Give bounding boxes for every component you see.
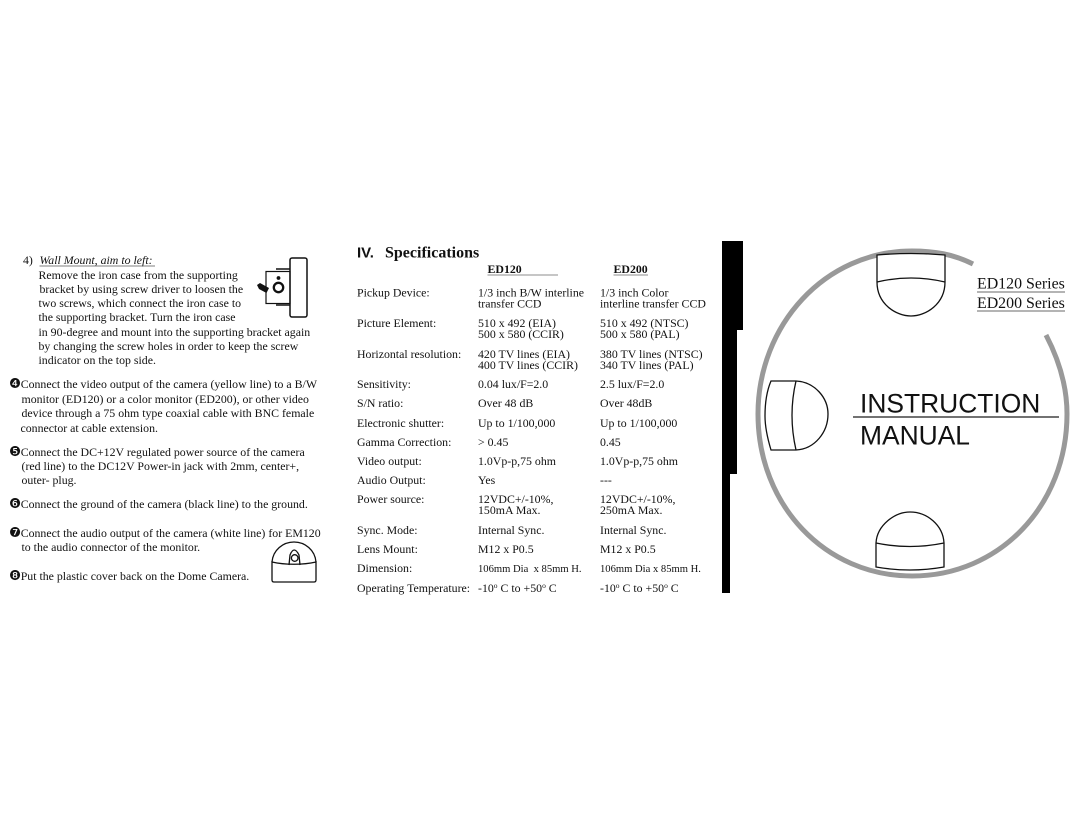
spec: sync mode: Sync. Mode:	[357, 523, 418, 537]
panel: installation steps	[9, 253, 321, 584]
text block: wall mount instructions: indicator on the top side.	[38, 353, 156, 367]
spec: audio output: ---	[600, 473, 612, 487]
spec: electronic shutter	[357, 416, 677, 430]
spec: s/n ratio: Over 48 dB	[478, 396, 533, 410]
spec: power source: 150mA Max.	[478, 503, 541, 517]
spec: operating temperature: C to +50	[498, 581, 542, 595]
step 8: Put the plastic cover back on the Dome Camera.	[21, 569, 249, 583]
spec: audio output	[357, 473, 612, 487]
spec: sensitivity: 2.5 lux/F=2.0	[600, 377, 664, 391]
title: instruction manual: MANUAL	[860, 420, 970, 450]
text block: wall mount instructions: two screws, which connect the iron case to	[38, 296, 241, 310]
step 4: Connect the video output of the camera (yellow line) to a B/W	[21, 377, 318, 391]
step 4: connector at cable extension.	[20, 421, 158, 435]
step 6: ❻	[9, 496, 21, 512]
text block: wall mount instructions: in 90-degree and mount into the supporting bracket again	[38, 325, 310, 339]
spec: sensitivity: Sensitivity:	[357, 377, 411, 391]
spec: s/n ratio: Over 48dB	[600, 396, 652, 410]
spec: horizontal resolution: 420 TV lines (EIA)	[478, 347, 570, 361]
series labels: ED200 Series	[977, 295, 1065, 312]
spec: operating temperature: o	[664, 581, 668, 590]
spec: operating temperature: C to +50	[620, 581, 664, 595]
spec: power source: 250mA Max.	[600, 503, 663, 517]
spec: sync mode	[357, 523, 666, 537]
spec: gamma correction: Gamma Correction:	[357, 435, 451, 449]
spec: lens mount: M12 x P0.5	[478, 542, 534, 556]
spec: electronic shutter: Up to 1/100,000	[600, 416, 677, 430]
spec: video output	[357, 454, 679, 468]
spec: pickup device: 1/3 inch B/W interline	[478, 286, 584, 300]
heading: specifications: IV.	[357, 244, 374, 262]
grey circle	[758, 251, 1067, 576]
icon: dome camera left	[765, 381, 828, 450]
icon: wall mount bracket	[257, 258, 307, 317]
heading: specifications: Specifications	[385, 244, 479, 262]
step 4: ❹	[9, 376, 21, 392]
spec: horizontal resolution	[357, 347, 703, 372]
spec: sensitivity	[357, 377, 664, 391]
panel: specifications	[357, 244, 706, 595]
series labels: ED120 Series	[977, 276, 1065, 292]
step 7: to the audio connector of the monitor.	[22, 540, 200, 554]
text block: wall mount instructions: the supporting bracket. Turn the iron case	[38, 310, 236, 324]
spec: sync mode: Internal Sync.	[478, 523, 544, 537]
title: instruction manual	[853, 388, 1059, 450]
spec: picture element: Picture Element:	[357, 316, 436, 330]
text block: wall mount instructions: bracket by using screw driver to loosen the	[40, 282, 243, 296]
spec: gamma correction	[357, 435, 621, 449]
step 4: monitor (ED120) or a color monitor (ED200), or other video	[22, 392, 309, 406]
step 5: Connect the DC+12V regulated power source of the camera	[21, 445, 305, 459]
spec: dimension: 106mm Dia x 85mm H.	[478, 564, 582, 575]
spec: operating temperature: o	[542, 581, 546, 590]
table header	[488, 262, 648, 276]
heading: wall mount: 4)	[23, 253, 33, 267]
spec: audio output: Audio Output:	[357, 473, 426, 487]
step 5: outer- plug.	[22, 473, 77, 487]
spec: dimension: 106mm Dia x 85mm H.	[600, 564, 701, 575]
spec: horizontal resolution: 340 TV lines (PAL)	[600, 358, 694, 372]
spec: power source	[357, 492, 675, 517]
spec: sensitivity: 0.04 lux/F=2.0	[478, 377, 548, 391]
spec: operating temperature: C	[668, 581, 679, 595]
spec: pickup device: transfer CCD	[478, 296, 542, 310]
step 5: ❺	[9, 444, 21, 460]
step 7: ❼	[9, 525, 21, 541]
panel: cover	[758, 251, 1067, 576]
spec: video output: 1.0Vp-p,75 ohm	[478, 454, 557, 468]
step 5	[9, 444, 305, 487]
step 6: Connect the ground of the camera (black line) to the ground.	[21, 497, 308, 511]
spec: sync mode: Internal Sync.	[600, 523, 666, 537]
table header: ED200	[614, 262, 648, 276]
spec: operating temperature: o	[494, 581, 498, 590]
spec: operating temperature	[357, 581, 679, 595]
spec: lens mount	[357, 542, 656, 556]
spec: s/n ratio: S/N ratio:	[357, 396, 403, 410]
spec: picture element: 500 x 580 (CCIR)	[478, 327, 564, 341]
icon: dome camera top	[877, 254, 945, 316]
spec: dimension: Dimension:	[357, 561, 412, 575]
text block: wall mount instructions: Remove the iron case from the supporting	[38, 268, 238, 282]
step 4: device through a 75 ohm type coaxial cable with BNC female	[22, 406, 314, 420]
title: instruction manual: INSTRUCTION	[860, 388, 1040, 418]
spec: pickup device	[357, 286, 706, 310]
step 8: ❽	[9, 568, 21, 584]
step 7: Connect the audio output of the camera (white line) for EM120	[21, 526, 321, 540]
spec: picture element: 500 x 580 (PAL)	[600, 327, 680, 341]
spec: video output: Video output:	[357, 454, 422, 468]
spec: operating temperature: -10	[600, 581, 616, 595]
spec: pickup device: Pickup Device:	[357, 286, 430, 300]
spec: horizontal resolution: Horizontal resolution:	[357, 347, 461, 361]
spec: horizontal resolution: 400 TV lines (CCIR)	[478, 358, 578, 372]
text block: wall mount instructions	[38, 268, 310, 367]
spec: gamma correction: 0.45	[600, 435, 621, 449]
spec: picture element: 510 x 492 (EIA)	[478, 316, 556, 330]
step 4	[9, 376, 318, 435]
spec: operating temperature: o	[616, 581, 620, 590]
series labels	[977, 276, 1065, 312]
icon: dome camera bottom	[876, 512, 944, 570]
spec: lens mount: Lens Mount:	[357, 542, 418, 556]
black binding bar	[722, 241, 743, 593]
spec: operating temperature: -10	[478, 581, 494, 595]
spec: power source: 12VDC+/-10%,	[600, 492, 675, 506]
step 7	[9, 525, 321, 554]
text block: wall mount instructions: by changing the screw holes in order to keep the screw	[38, 339, 299, 353]
spec: electronic shutter: Electronic shutter:	[357, 416, 444, 430]
spec: operating temperature: C	[546, 581, 557, 595]
step 5: (red line) to the DC12V Power-in jack with 2mm, center+,	[22, 459, 299, 473]
spec: power source: Power source:	[357, 492, 424, 506]
spec: lens mount: M12 x P0.5	[600, 542, 656, 556]
icon: dome camera	[272, 542, 316, 582]
table header: ED120	[488, 262, 522, 276]
spec: picture element	[357, 316, 689, 341]
spec: pickup device: interline transfer CCD	[600, 296, 706, 310]
spec: video output: 1.0Vp-p,75 ohm	[600, 454, 679, 468]
spec: pickup device: 1/3 inch Color	[600, 286, 668, 300]
spec: power source: 12VDC+/-10%,	[478, 492, 553, 506]
spec: picture element: 510 x 492 (NTSC)	[600, 316, 689, 330]
spec: dimension	[357, 561, 701, 575]
spec: s/n ratio	[357, 396, 652, 410]
spec: operating temperature: Operating Temperature:	[357, 581, 470, 595]
spec: horizontal resolution: 380 TV lines (NTSC)	[600, 347, 703, 361]
heading: wall mount: Wall Mount, aim to left:	[40, 253, 153, 267]
spec: audio output: Yes	[478, 473, 496, 487]
spec: electronic shutter: Up to 1/100,000	[478, 416, 555, 430]
spec: gamma correction: > 0.45	[478, 435, 508, 449]
